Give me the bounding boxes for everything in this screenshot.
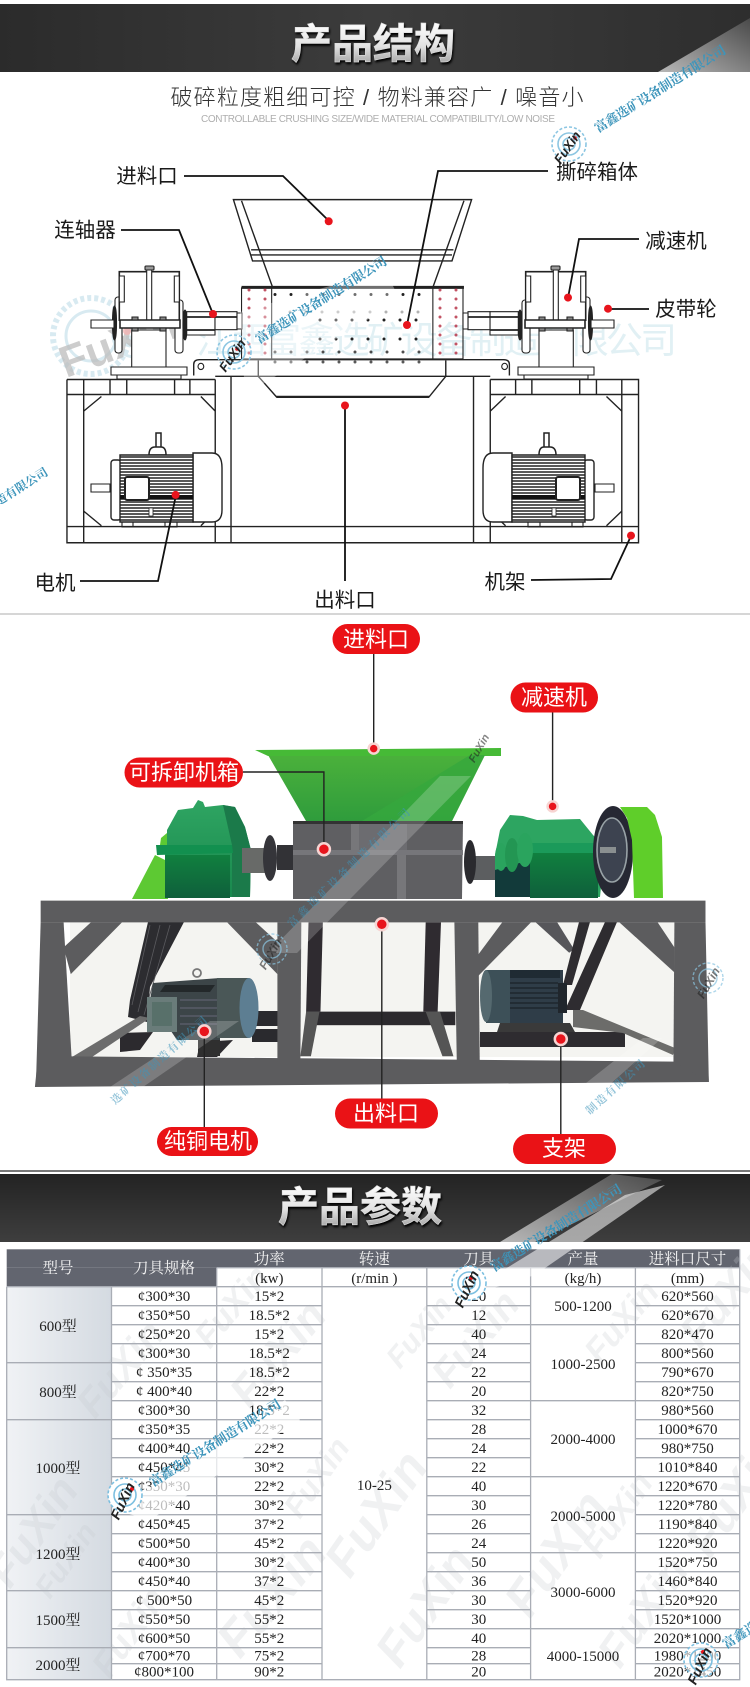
watermarks: FuXin: [493, 1480, 619, 1626]
column: blade count: 26: [471, 1517, 487, 1533]
watermark: company name and logo: [53, 298, 677, 387]
column: blade spec: ¢ 400*40: [136, 1384, 192, 1400]
right motor: [480, 970, 567, 1023]
table header cells: [7, 1249, 740, 1287]
column: model: 1200型: [35, 1545, 81, 1563]
column: blade count: 22: [471, 1365, 486, 1381]
watermarks: FuXin: [380, 1289, 459, 1374]
label: belt pulley: 皮带轮: [655, 298, 717, 321]
left gearbox green: [132, 800, 251, 899]
table header text: 型号: [42, 1259, 74, 1277]
table header text: [42, 1250, 726, 1277]
hopper green: [255, 748, 501, 821]
header band: product structure: 产品结构: [291, 21, 455, 67]
left motor: [147, 969, 258, 1056]
shredder box bolt holes: [275, 294, 432, 362]
header band: product parameters: [0, 1174, 750, 1242]
column: blade count: 20: [471, 1665, 486, 1681]
column: output: 2000-5000: [550, 1509, 616, 1525]
column: power: 15*2: [254, 1327, 284, 1343]
column: output: 2000-4000: [550, 1432, 616, 1448]
column: blade count: 40: [471, 1327, 486, 1343]
left coupling: [242, 835, 293, 881]
column: power: 37*2: [254, 1517, 284, 1533]
column: power: 37*2: [254, 1574, 284, 1590]
stamp: company logo center: FuXin: [216, 336, 249, 375]
stamp: company logo on table bottom right: FuXin: [684, 1645, 715, 1687]
column: blade spec: ¢250*20: [138, 1327, 190, 1343]
table header text: 刀具规格: [133, 1259, 195, 1277]
pill label: removable box: 可拆卸机箱: [129, 760, 239, 785]
callout dots: [198, 744, 567, 1045]
column: blade spec: ¢450*45: [138, 1460, 190, 1476]
back structure: [300, 922, 574, 1056]
column: power: 30*2: [254, 1498, 284, 1514]
column: output: [547, 1299, 619, 1665]
pill label: copper motor: 纯铜电机: [164, 1129, 252, 1154]
model column cells: [7, 1287, 112, 1680]
faint stamps on photo: 富鑫选矿设备制造有限公司: [284, 805, 413, 930]
column: power: 22*2: [254, 1479, 284, 1495]
column: power: 75*2: [254, 1649, 284, 1665]
column: inlet size: 2020*1450: [654, 1665, 721, 1681]
label: feed inlet: 进料口: [116, 165, 178, 188]
column: blade count: 22: [471, 1460, 486, 1476]
column: output: 3000-6000: [550, 1585, 616, 1601]
red end-hole columns: [249, 290, 456, 360]
column: blade count: 24: [471, 1346, 487, 1362]
section separator: [0, 613, 750, 615]
column: blade spec: ¢700*70: [138, 1649, 190, 1665]
column: blade count: 20: [471, 1289, 486, 1305]
leader lines: [204, 652, 561, 1134]
table units: (kw): [255, 1271, 283, 1287]
green belt guard: [620, 807, 663, 898]
label: shredding box: 撕碎箱体: [556, 161, 638, 184]
label: frame: 机架: [484, 571, 526, 594]
table grid: [7, 1249, 740, 1680]
column: power: 15*2: [254, 1289, 284, 1305]
faint stamps on photo: [108, 732, 723, 1117]
watermarks: FuXin: [83, 1579, 174, 1685]
column: blade count: 36: [471, 1574, 487, 1590]
column: blade count: 30: [471, 1593, 486, 1609]
parameter table: [0, 1231, 750, 1685]
column: inlet size: 1980*1200: [654, 1649, 721, 1665]
column: blade count: 30: [471, 1498, 486, 1514]
column: power: 18.5*2: [249, 1308, 290, 1324]
column: blade spec: ¢300*30: [138, 1403, 190, 1419]
separator: [0, 1170, 750, 1172]
watermarks: FuXin: [588, 1548, 698, 1676]
table units: (kg/h): [565, 1271, 601, 1287]
stamp: company logo on table middle: FuXin: [107, 1480, 138, 1522]
callout dots: [172, 217, 635, 540]
column: blade spec: ¢300*30: [138, 1346, 190, 1362]
pill label: discharge outlet: [335, 1098, 438, 1128]
column: blade spec: ¢450*45: [138, 1517, 190, 1533]
column: blade count: 20: [471, 1384, 486, 1400]
column: blade count: 32: [471, 1403, 486, 1419]
stamp: company logo on table top: FuXin: [451, 1268, 482, 1310]
faint stamps on photo: 制造有限公司: [583, 1057, 648, 1117]
faint stamps on photo: FuXin: [256, 936, 285, 972]
column: inlet size: 980*560: [661, 1403, 714, 1419]
column: power: 18.5*2: [249, 1365, 290, 1381]
column: blade count: 40: [471, 1479, 486, 1495]
column: blade spec: [134, 1289, 194, 1681]
light streaks: [110, 776, 662, 1087]
column: power: 22*2: [254, 1384, 284, 1400]
column: blade spec: ¢400*30: [138, 1555, 190, 1571]
column: power: 45*2: [254, 1536, 284, 1552]
pill label: reducer: [510, 682, 598, 712]
column: power: 18.5*2: [249, 1403, 290, 1419]
right coupling: [464, 840, 495, 884]
column: power: 55*2: [254, 1631, 284, 1647]
watermarks: FuXin: [423, 1282, 528, 1396]
faint stamps on photo: 选矿设备制造有限公司: [108, 1013, 210, 1107]
watermarks: FuXin: [220, 1291, 336, 1416]
watermark: company name and logo: 江西富鑫选矿设备制造有限公司: [196, 320, 677, 361]
shredder box: [242, 287, 464, 359]
column: inlet size: 980*750: [661, 1441, 714, 1457]
pill label: reducer: 减速机: [521, 685, 587, 710]
section: green machine photo: [35, 624, 723, 1164]
pulley: [593, 806, 633, 898]
column: blade spec: ¢ 350*35: [136, 1365, 192, 1381]
column: inlet size: 1520*750: [658, 1555, 718, 1571]
column: blade spec: ¢ 500*50: [136, 1593, 192, 1609]
watermarks: FuXin: [577, 1273, 667, 1370]
left motor: [91, 433, 222, 527]
column: inlet size: 620*670: [661, 1308, 714, 1324]
english subtitle: CONTROLLABLE CRUSHING SIZE/WIDE MATERIAL COMPATIBILITY/LOW NOISE: [201, 114, 555, 125]
shredder box grey: [293, 821, 463, 899]
column: model: 2000型: [35, 1656, 81, 1674]
column: blade count: 12: [471, 1308, 486, 1324]
column: inlet size: 1220*780: [658, 1498, 718, 1514]
stamp: company logo center: [216, 253, 400, 395]
column: power: 45*2: [254, 1593, 284, 1609]
column: blade count: 24: [471, 1536, 487, 1552]
leader lines: [80, 171, 649, 581]
faint stamps on photo: FuXin: [694, 965, 723, 1001]
stamp: company logo on table bottom right: [684, 1611, 750, 1687]
column: blade spec: ¢350*35: [138, 1422, 190, 1438]
column: blade spec: ¢600*50: [138, 1631, 190, 1647]
column: blade spec: ¢450*40: [138, 1574, 190, 1590]
column: model: 1000型: [35, 1459, 81, 1477]
column: inlet size: 1460*840: [658, 1574, 718, 1590]
column: power: 90*2: [254, 1665, 284, 1681]
column: blade spec: ¢400*40: [138, 1441, 190, 1457]
column: speed: 10-25: [357, 1478, 392, 1494]
column: blade count: 28: [471, 1649, 486, 1665]
column: power: 22*2: [254, 1441, 284, 1457]
header band: product parameters: 产品参数: [278, 1184, 442, 1230]
column: output: 1000-2500: [550, 1357, 616, 1373]
column: inlet size: 800*560: [661, 1346, 714, 1362]
column: inlet size: 820*750: [661, 1384, 714, 1400]
stamp: company logo top right: 富鑫选矿设备制造有限公司: [592, 42, 728, 136]
column: blade spec: ¢350*50: [138, 1308, 190, 1324]
watermarks: FuXin: [68, 1312, 173, 1426]
column: inlet size: 1220*670: [658, 1479, 718, 1495]
frame: grey steel: [35, 901, 709, 1087]
stamp: company logo top right: [551, 42, 728, 167]
column: inlet size: 1520*1000: [654, 1612, 721, 1628]
column: inlet size: 1010*840: [658, 1460, 718, 1476]
label: coupling: 连轴器: [54, 219, 116, 242]
table header text: 产量: [567, 1250, 599, 1268]
column: inlet size: [654, 1289, 721, 1681]
column: power: 30*2: [254, 1555, 284, 1571]
stamp: company logo center: 富鑫选矿设备制造有限公司: [253, 253, 389, 347]
column: model: 800型: [39, 1383, 77, 1401]
section: product parameters: [0, 1170, 750, 1687]
watermarks: FuXin: [187, 1258, 277, 1355]
column: blade spec: ¢800*100: [134, 1665, 194, 1681]
watermarks: FuXin: [313, 1440, 439, 1586]
table units: (mm): [671, 1271, 704, 1287]
back rails and belts: [72, 922, 675, 1057]
hopper: [233, 200, 472, 287]
table header text: 功率: [254, 1250, 285, 1268]
column: blade count: 30: [471, 1612, 486, 1628]
lower plate and discharge chute: [194, 360, 509, 397]
table header text: 转速: [359, 1250, 390, 1268]
column: output: 4000-15000: [547, 1649, 619, 1665]
column: inlet size: 790*670: [661, 1365, 714, 1381]
column: blade spec: ¢420*40: [138, 1498, 190, 1514]
watermark: company name and logo: FuXin: [53, 300, 184, 387]
left gearbox: [91, 266, 242, 379]
column: blade spec: ¢300*30: [138, 1289, 190, 1305]
stamp: company logo on table top: [451, 1181, 665, 1310]
right gearbox green: [495, 815, 605, 898]
column: blade spec: ¢550*50: [138, 1612, 190, 1628]
column: output: 500-1200: [554, 1299, 612, 1315]
section: product structure: [0, 4, 750, 612]
table header text: 进料口尺寸: [649, 1250, 726, 1268]
column: blade spec: ¢500*50: [138, 1536, 190, 1552]
column: inlet size: 1220*920: [658, 1536, 718, 1552]
column: blade count: 28: [471, 1422, 486, 1438]
column: blade count: 50: [471, 1555, 486, 1571]
watermarks: FuXin: [276, 1431, 357, 1524]
column: power: 55*2: [254, 1612, 284, 1628]
right motor: [483, 433, 614, 527]
column: power: [249, 1289, 290, 1681]
column: inlet size: 1520*920: [658, 1593, 718, 1609]
column: inlet size: 1000*670: [658, 1422, 718, 1438]
frame: [67, 376, 639, 543]
watermarks: FuXin: [575, 1465, 661, 1565]
column: inlet size: 2020*1000: [654, 1631, 721, 1647]
label: discharge outlet: 出料口: [314, 589, 376, 612]
column: power: 18.5*2: [249, 1346, 290, 1362]
column: power: 22*2: [254, 1422, 284, 1438]
table units: [255, 1271, 704, 1287]
column: inlet size: 1190*840: [658, 1517, 717, 1533]
stamp: company logo on table middle: [107, 1396, 300, 1522]
label: reducer: 减速机: [645, 230, 707, 253]
pill label: feed inlet: 进料口: [343, 627, 409, 652]
column: inlet size: 620*560: [661, 1289, 714, 1305]
label: motor: 电机: [34, 572, 76, 595]
diagram: shredder line drawing: [67, 200, 639, 543]
table header text: 刀具: [463, 1250, 496, 1268]
watermarks: FuXin: [206, 1525, 338, 1667]
column: inlet size: 820*470: [661, 1327, 714, 1343]
column: blade count: 24: [471, 1441, 487, 1457]
stamp: company logo on table top: 富鑫选矿设备制造有限公司: [488, 1181, 624, 1275]
column: blade spec: ¢350*30: [138, 1479, 190, 1495]
pill label: discharge outlet: 出料口: [353, 1101, 419, 1126]
table units: (r/min ): [351, 1271, 398, 1287]
column: model: 1500型: [35, 1611, 81, 1629]
stamp: company logo top right: FuXin: [551, 128, 584, 167]
pill label: support: 支架: [542, 1136, 586, 1161]
watermarks: FuXin: [366, 1537, 485, 1676]
column: blade count: [471, 1289, 487, 1681]
pill label: feed inlet: [332, 624, 420, 654]
faint stamps on photo: FuXin: [467, 732, 492, 765]
subtitle: 破碎粒度粗细可控 / 物料兼容广 / 噪音小: [170, 85, 584, 110]
watermarks: [0, 1231, 750, 1685]
column: blade count: 40: [471, 1631, 486, 1647]
stamp: company logo on table middle: 富鑫选矿设备制造有限公司: [147, 1396, 283, 1490]
right gearbox: [463, 266, 614, 379]
column: model: [35, 1317, 81, 1674]
pale backdrop behind machine frame: [70, 922, 675, 1057]
column: model: 600型: [39, 1317, 77, 1335]
column: power: 30*2: [254, 1460, 284, 1476]
pill label: support: [513, 1134, 616, 1164]
watermarks: FuXin: [29, 1517, 104, 1604]
header band: product structure: [0, 4, 750, 72]
